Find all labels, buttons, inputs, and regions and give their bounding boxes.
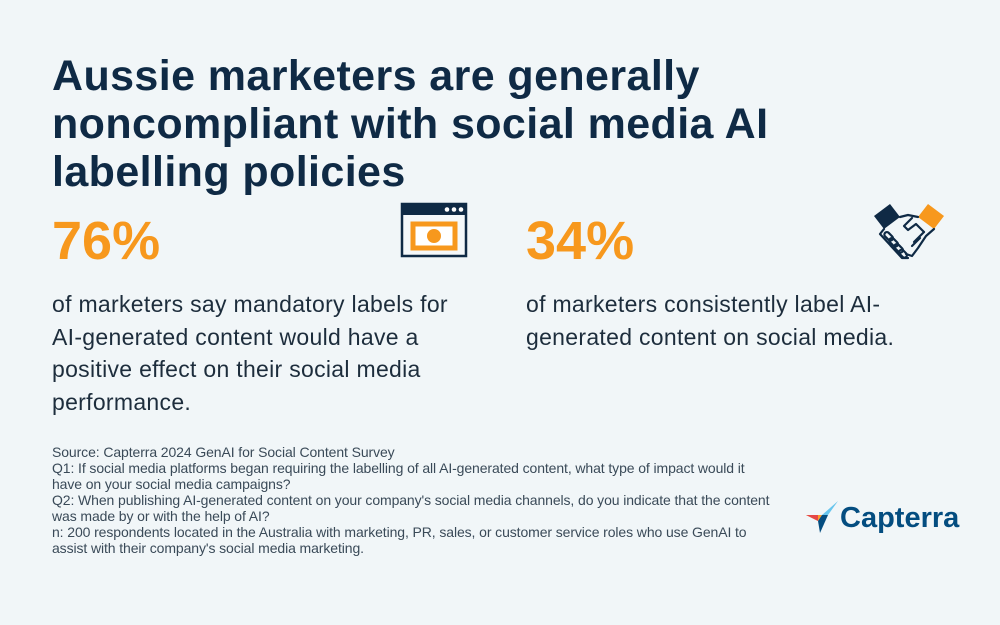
stat 2 number: 34% — [526, 211, 634, 271]
icon: browser money — [400, 202, 468, 258]
stat 2 — [526, 211, 894, 350]
source notes — [52, 444, 770, 556]
stat 1 number: 76% — [52, 211, 160, 271]
stat 2 text: of marketers consistently label AI-generated content on social media. — [526, 291, 894, 350]
source notes: Q2: When publishing AI-generated content on your company's social media channels, do you indicate that the content — [52, 492, 769, 508]
source notes: Source: Capterra 2024 GenAI for Social Content Survey — [52, 444, 395, 460]
title: Aussie marketers are generally noncompliant with social media AI labelling policies — [52, 52, 768, 196]
source notes: was made by or with the help of AI? — [52, 508, 270, 524]
stat 1 text: of marketers say mandatory labels for AI-generated content would have a positive effect on their social media performance. — [52, 291, 448, 414]
source notes: n: 200 respondents located in the Australia with marketing, PR, sales, or customer service roles who use GenAI to — [52, 524, 746, 540]
stat 1 — [52, 211, 448, 415]
source notes: have on your social media campaigns? — [52, 476, 290, 492]
icon: handshake — [874, 204, 944, 260]
source notes: assist with their company's social media marketing. — [52, 540, 364, 556]
source notes: Q1: If social media platforms began requiring the labelling of all AI-generated content, what type of impact would it — [52, 460, 745, 476]
logo: Capterra: Capterra — [840, 502, 959, 534]
